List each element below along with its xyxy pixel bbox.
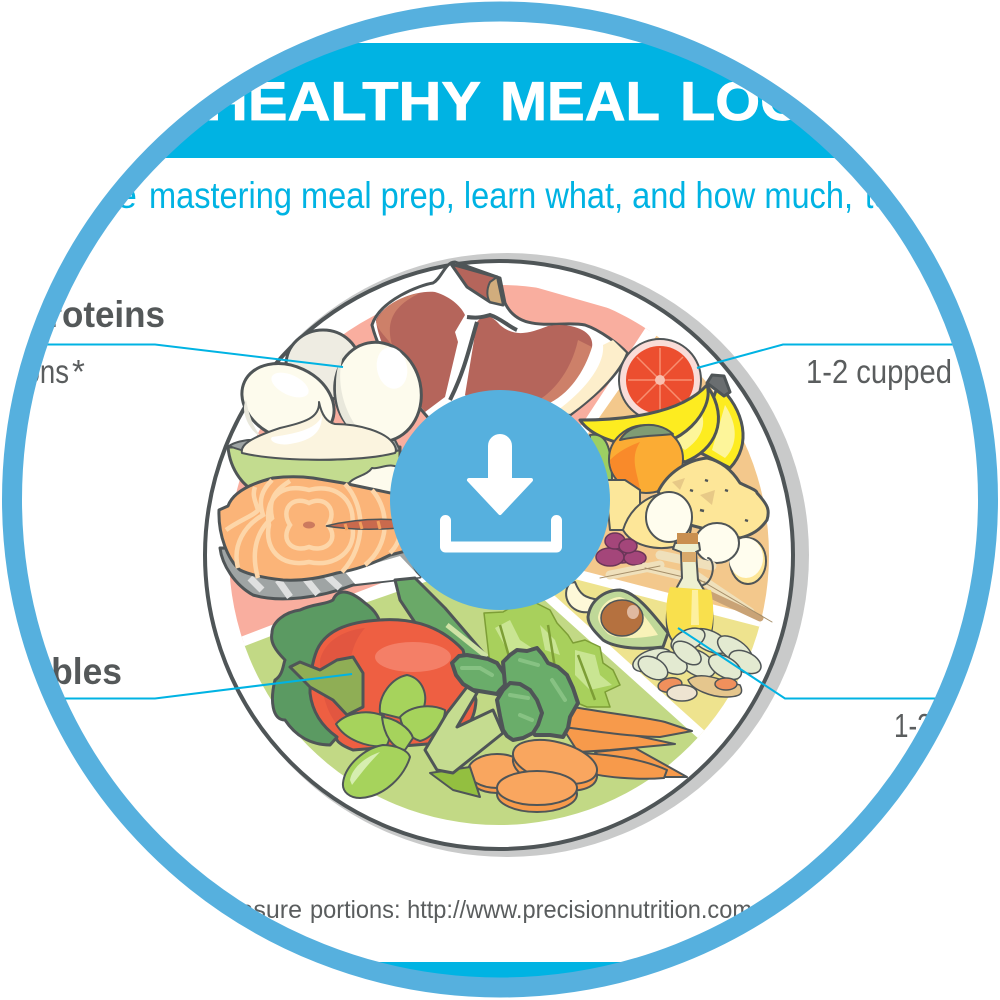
icon: download button [390, 390, 610, 610]
food: red pepper [290, 620, 476, 750]
leader line: vegetables [55, 674, 352, 698]
food: broccoli [425, 648, 578, 773]
plate sectors [230, 285, 769, 825]
title banner: MEAL [500, 70, 660, 132]
food: apple [590, 435, 612, 480]
food: eggs [229, 330, 430, 455]
food: leafy greens [272, 578, 620, 745]
leader line: fats [678, 628, 945, 698]
bottom banner [379, 962, 621, 978]
food: cashew [566, 582, 600, 612]
food: carrots [468, 707, 692, 812]
food: potatoes [623, 458, 768, 584]
footnote: portions: http://www.precisionnutrition.com [310, 896, 752, 924]
food: steak [372, 262, 627, 430]
food: salmon [219, 477, 420, 599]
leader line: proteins [40, 344, 343, 367]
food: wheat [600, 555, 772, 622]
food: beans [596, 533, 646, 566]
subtitle: to eat [865, 175, 942, 216]
title banner: HEALTHY [205, 70, 481, 132]
footnote: to measure [177, 896, 302, 924]
food: bananas [580, 375, 743, 468]
food: olive oil bottle [666, 533, 713, 643]
heading: proteins: Proteins [25, 294, 165, 335]
subtitle: Before [28, 175, 137, 216]
portion label: proteins [36, 360, 84, 384]
portion label: proteins: * [72, 353, 85, 390]
footnote [246, 900, 750, 923]
plate [203, 253, 809, 857]
food: orange [609, 425, 683, 493]
food: pumpkin seeds and nuts [630, 623, 765, 701]
title banner: LOOKS [680, 70, 885, 132]
food: avocado [588, 590, 668, 648]
food: yogurt bowl [228, 402, 402, 500]
food: grapefruit [619, 339, 701, 421]
leader line: carbohydrates [697, 344, 965, 368]
title banner [166, 43, 834, 158]
subtitle: mastering meal prep, learn what, and how much, [149, 175, 853, 216]
portion label: carbohydrates: 1-2 cupped [806, 353, 952, 390]
food: basil leaves [336, 675, 480, 798]
food: pasta [605, 480, 640, 530]
